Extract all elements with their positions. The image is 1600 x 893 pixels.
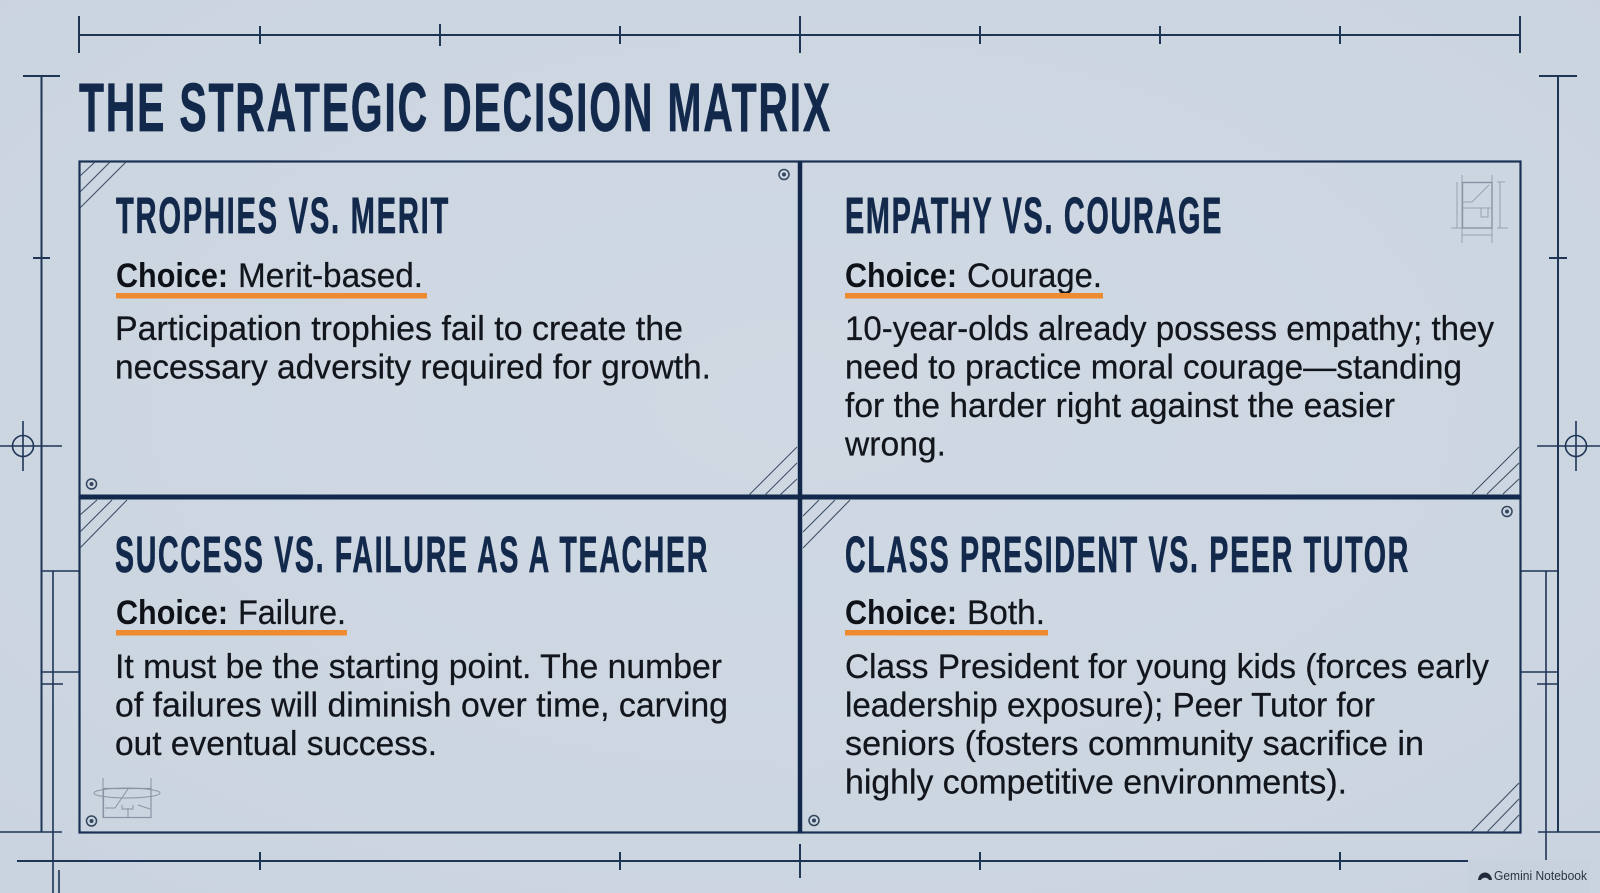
body text: Class President for young kids (forces early bbox=[845, 648, 1489, 686]
choice bbox=[845, 257, 1102, 295]
title: THE STRATEGIC DECISION MATRIX bbox=[79, 69, 832, 146]
body text: for the harder right against the easier bbox=[845, 387, 1395, 425]
choice: Both. bbox=[967, 594, 1045, 632]
body text: out eventual success. bbox=[115, 725, 437, 763]
heading: TROPHIES VS. MERIT bbox=[116, 187, 450, 244]
choice: Courage. bbox=[967, 257, 1102, 295]
hatch corners bbox=[80, 162, 797, 495]
choice bbox=[845, 594, 1045, 632]
hatch corner bbox=[80, 500, 127, 548]
choice underline bbox=[116, 630, 347, 636]
heading: SUCCESS VS. FAILURE AS A TEACHER bbox=[115, 526, 709, 583]
body text bbox=[115, 310, 711, 386]
choice underline bbox=[116, 293, 427, 298]
watermark badge bbox=[1468, 860, 1590, 893]
top dimension ruler bbox=[79, 16, 1520, 53]
choice: Choice: bbox=[116, 257, 228, 295]
icon: blueprint sketch bbox=[94, 778, 160, 818]
body text: wrong. bbox=[844, 426, 946, 464]
icon: blueprint sketch bbox=[1451, 175, 1508, 243]
watermark badge: Gemini Notebook bbox=[1494, 869, 1588, 883]
choice bbox=[116, 257, 423, 295]
choice: Choice: bbox=[845, 257, 957, 295]
panel: trophies vs merit bbox=[80, 162, 797, 495]
panel: empathy vs courage bbox=[844, 175, 1519, 494]
hatch corners bbox=[803, 500, 1519, 832]
choice bbox=[116, 594, 346, 632]
bottom dimension ruler bbox=[17, 844, 1468, 878]
panel: success vs failure as a teacher bbox=[80, 500, 728, 826]
choice: Choice: bbox=[845, 594, 957, 632]
registration dots bbox=[86, 170, 789, 489]
body text: necessary adversity required for growth. bbox=[115, 348, 711, 386]
body text: need to practice moral courage—standing bbox=[845, 348, 1462, 386]
body text: Participation trophies fail to create the bbox=[115, 310, 683, 348]
body text: highly competitive environments). bbox=[845, 764, 1347, 802]
body text bbox=[844, 310, 1494, 464]
body text: of failures will diminish over time, carving bbox=[115, 686, 728, 724]
hatch corner bbox=[1472, 447, 1519, 494]
right blueprint frame bbox=[1521, 76, 1600, 860]
matrix frame bbox=[79, 161, 1521, 833]
choice underline bbox=[845, 293, 1103, 298]
registration dot bbox=[86, 816, 96, 826]
body text bbox=[845, 648, 1489, 802]
choice: Failure. bbox=[238, 594, 346, 632]
body text: leadership exposure); Peer Tutor for bbox=[845, 686, 1375, 724]
choice: Choice: bbox=[116, 594, 228, 632]
body text: It must be the starting point. The number bbox=[115, 648, 722, 686]
left blueprint frame bbox=[0, 76, 79, 893]
icon: gemini mark bbox=[1478, 872, 1492, 880]
body text: seniors (fosters community sacrifice in bbox=[845, 725, 1424, 763]
choice: Merit-based. bbox=[238, 257, 423, 295]
choice underline bbox=[845, 630, 1048, 636]
panel: class president vs peer tutor bbox=[803, 500, 1519, 832]
body text bbox=[115, 648, 728, 763]
body text: 10-year-olds already possess empathy; they bbox=[845, 310, 1494, 348]
registration dots bbox=[809, 506, 1512, 826]
heading: EMPATHY VS. COURAGE bbox=[845, 187, 1223, 244]
